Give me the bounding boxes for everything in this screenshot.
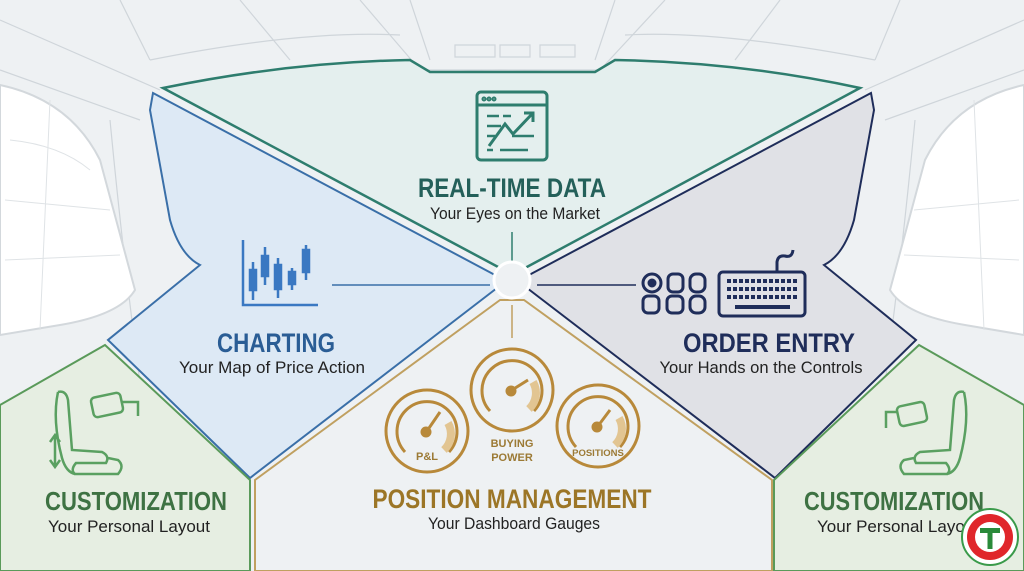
panel: charting <box>108 93 497 478</box>
panel: real-time data <box>163 60 860 268</box>
icon: keypad and keyboard <box>643 250 805 316</box>
gauge: buying power: POWER <box>491 452 533 464</box>
subtitle: Your Personal Layout <box>817 517 979 536</box>
icon: seat and mirror right <box>886 392 966 474</box>
panel: customization left <box>0 345 250 571</box>
gauge: buying power <box>471 349 553 464</box>
center hub <box>494 262 530 298</box>
heading: real-time data: REAL-TIME DATA <box>418 173 606 203</box>
heading: order entry: ORDER ENTRY <box>683 328 855 358</box>
heading: customization right: CUSTOMIZATION <box>804 486 984 516</box>
heading: charting: CHARTING <box>217 328 335 358</box>
logo badge <box>962 509 1018 565</box>
heading: customization: CUSTOMIZATION <box>45 486 227 516</box>
subtitle: Your Personal Layout <box>48 517 210 536</box>
subtitle: Your Dashboard Gauges <box>428 514 600 533</box>
gauge: buying power: BUYING <box>491 438 533 450</box>
panel: customization right <box>774 345 1024 571</box>
subtitle: Your Map of Price Action <box>179 358 365 377</box>
subtitle: Your Eyes on the Market <box>430 204 600 223</box>
panel: order entry <box>527 93 916 478</box>
icon: candlesticks <box>243 240 318 305</box>
icon: seat and mirror <box>50 392 138 474</box>
panel: position management <box>255 300 772 571</box>
heading: position management: POSITION MANAGEMENT <box>372 484 652 514</box>
gauge: P&L <box>386 390 468 472</box>
subtitle: Your Hands on the Controls <box>660 358 862 377</box>
gauge: positions <box>557 385 639 467</box>
side windows <box>0 85 135 335</box>
gauge: P&L: P&L <box>416 451 438 463</box>
icon: data screen <box>477 92 547 160</box>
gauge: positions: POSITIONS <box>572 448 624 459</box>
